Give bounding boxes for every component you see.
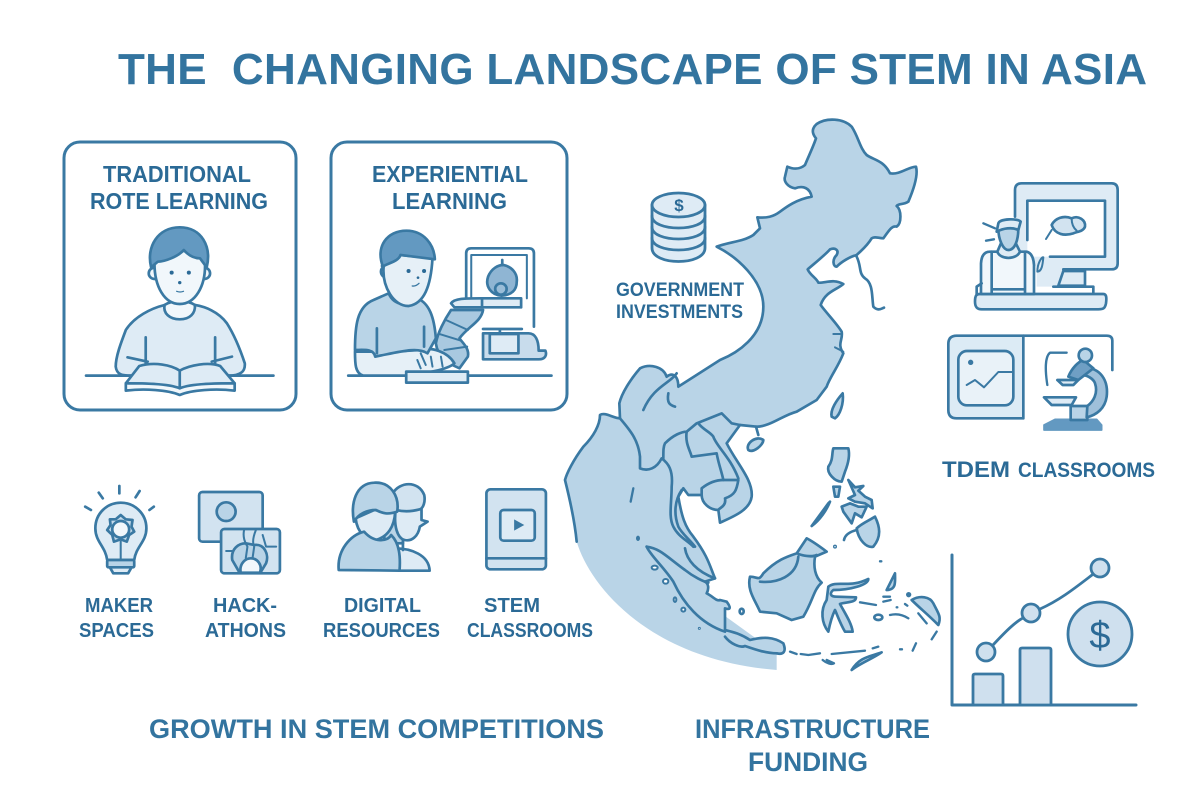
heading: experiential learning	[372, 161, 528, 214]
map: east and southeast asia	[565, 120, 940, 670]
taiwan and hainan	[831, 393, 843, 418]
heading: traditional rote learning: ROTE LEARNING	[90, 188, 268, 214]
lesser sunda islands	[790, 647, 878, 664]
label: tdem classrooms	[942, 457, 1155, 482]
heading: infrastructure funding: INFRASTRUCTURE	[695, 714, 930, 744]
heading: infrastructure funding: FUNDING	[748, 747, 868, 777]
label: stem classrooms: CLASSROOMS	[467, 619, 593, 642]
label: digital resources: RESOURCES	[323, 619, 440, 642]
label: digital resources	[323, 594, 440, 642]
philippines	[828, 448, 849, 482]
label: government investments	[616, 280, 744, 323]
label: hackathons: HACK-	[213, 594, 277, 617]
trend line with points	[977, 559, 1109, 661]
icon: government investments coin stack: $	[674, 196, 684, 215]
title: THE CHANGING LANDSCAPE OF STEM IN ASIA	[118, 45, 1147, 94]
illustration: student reading a book	[86, 227, 273, 395]
icon: maker spaces light bulb	[85, 486, 154, 573]
heading: experiential learning: LEARNING	[392, 188, 507, 214]
panel: experiential learning	[331, 142, 567, 410]
icon: government investments coin stack	[652, 193, 705, 262]
label: tdem classrooms: CLASSROOMS	[1018, 459, 1155, 482]
chart: infrastructure funding growth	[952, 555, 1136, 705]
illustration: student with robotic arm and 3d printer	[348, 231, 551, 383]
label: digital resources: DIGITAL	[344, 594, 421, 617]
panel: traditional rote learning	[64, 142, 296, 410]
sumatra western islands	[637, 537, 700, 629]
label: hackathons	[205, 594, 286, 642]
maluku and papua	[887, 573, 895, 590]
heading: experiential learning: EXPERIENTIAL	[372, 161, 528, 187]
heading: traditional rote learning	[90, 161, 268, 214]
heading: infrastructure funding	[695, 714, 930, 777]
bars	[973, 648, 1051, 705]
label: stem classrooms: STEM	[484, 594, 540, 617]
dollar coin: $	[1089, 615, 1111, 657]
heading: traditional rote learning: TRADITIONAL	[103, 161, 251, 187]
label: government investments: GOVERNMENT	[616, 280, 744, 301]
icon: teacher at monitor	[975, 183, 1118, 309]
heading: growth in stem competitions: GROWTH IN STEM COMPETITIONS	[149, 714, 604, 744]
label: maker spaces	[79, 594, 154, 642]
icon: stem classrooms tablet	[486, 489, 546, 569]
label: maker spaces: MAKER	[85, 594, 153, 617]
label: stem classrooms	[467, 594, 593, 642]
sulawesi	[822, 579, 868, 632]
borneo	[749, 538, 827, 620]
label: government investments: INVESTMENTS	[616, 302, 743, 323]
label: tdem classrooms: TDEM	[942, 457, 1010, 482]
dollar coin	[1068, 602, 1132, 666]
icon: chart board and microscope	[948, 336, 1112, 430]
label: maker spaces: SPACES	[79, 619, 154, 642]
label: hackathons: ATHONS	[205, 619, 286, 642]
icon: digital resources people	[339, 483, 430, 571]
icon: hackathons cards	[199, 492, 280, 573]
